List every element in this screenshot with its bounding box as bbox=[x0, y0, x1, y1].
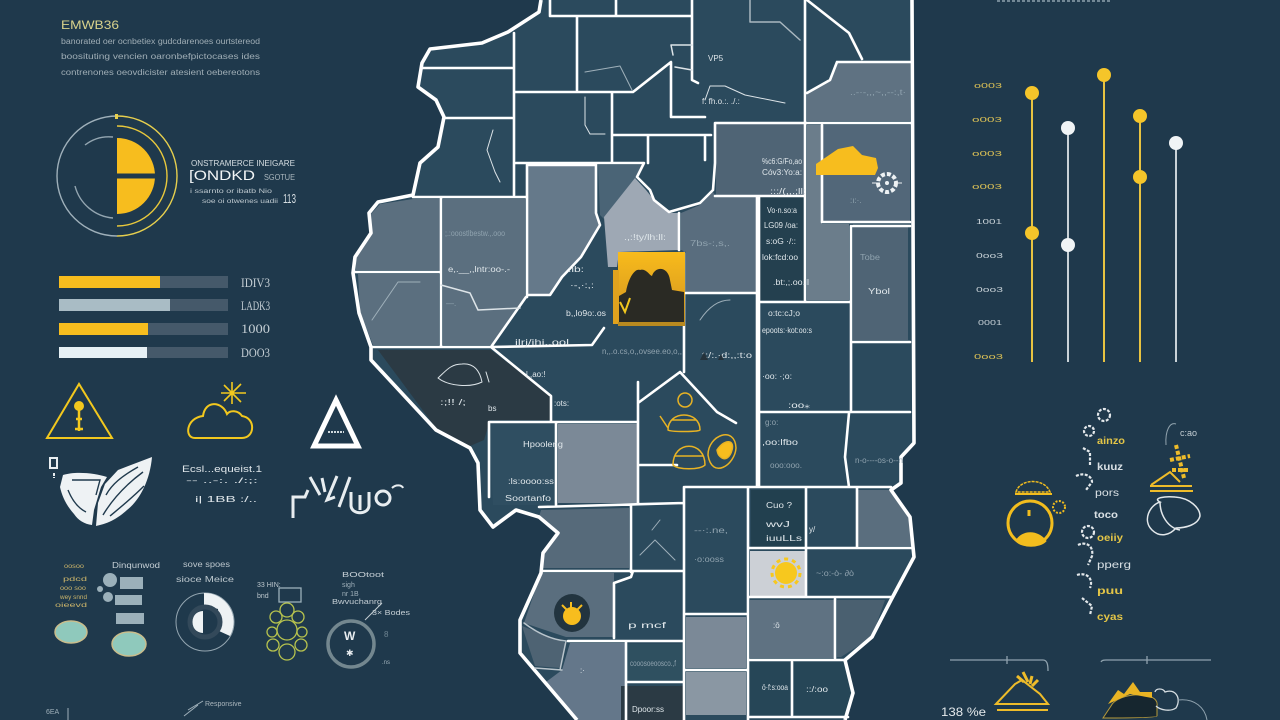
icon: yellow sun and cloud bbox=[188, 382, 252, 438]
map text labels: Tobe bbox=[860, 253, 881, 262]
chart: small clusters with text and clouds: ooo soo bbox=[60, 585, 86, 592]
chart: ring with labels: .ns bbox=[382, 660, 390, 666]
icon: yellow cloud on map bbox=[816, 146, 878, 175]
bar chart bbox=[59, 275, 270, 360]
map text labels: —. bbox=[446, 299, 456, 308]
bar chart: 1000 bbox=[241, 321, 270, 336]
lollipop axis labels: 0oo3 bbox=[976, 287, 1003, 294]
icon: scribbled white glyph cluster bbox=[293, 476, 403, 518]
chart: ring with labels: sigh bbox=[342, 582, 355, 589]
map text labels: n-o----os-o--n bbox=[855, 456, 903, 465]
map text labels: VP5 bbox=[708, 54, 724, 63]
map text labels: ·oo: ·;o: bbox=[762, 372, 792, 381]
map text labels bbox=[440, 54, 906, 714]
lollipop axis labels: 0001 bbox=[978, 320, 1002, 327]
map text labels: .,:!ty/lh:ll: bbox=[624, 233, 666, 242]
icon: yellow tree with mountain and white cloud: c:ao bbox=[1180, 428, 1197, 438]
chart: ring with labels: Bwvuchanrg bbox=[332, 597, 382, 606]
donut caption text bbox=[189, 159, 296, 206]
map text labels: iuuLLs bbox=[766, 534, 802, 543]
chart: small clusters with text and clouds: oosoo bbox=[64, 563, 84, 570]
map text labels: lok:fcd:oo bbox=[762, 253, 799, 262]
chart: small clusters with text and clouds: Dinqunwod bbox=[112, 561, 160, 570]
map text labels: cooosoeoosco.,f bbox=[630, 659, 677, 668]
map text labels: ;.:ooostlbestw.,.ooo bbox=[445, 229, 505, 238]
list: labels with flower icons: pperg bbox=[1097, 560, 1131, 571]
map text labels: p mcf bbox=[628, 621, 668, 630]
map text labels: Soortanfo bbox=[505, 494, 552, 503]
map text labels: :ots: bbox=[554, 399, 569, 408]
map text labels: --·:.ne, bbox=[694, 526, 728, 535]
lollipop axis labels: o003 bbox=[972, 184, 1002, 191]
map text labels: 7bs-:,s,. bbox=[690, 239, 730, 248]
icon: yellow-green lattice hexagon figure: 33 HIN: bbox=[257, 582, 281, 589]
map text labels: ·o:ooss bbox=[694, 555, 724, 564]
map text labels: n,,.o.cs,o,,ovsee.eo,o,, bbox=[602, 347, 682, 356]
lollipop axis labels: 0oo3 bbox=[974, 354, 1003, 361]
map text labels: :· bbox=[580, 666, 585, 675]
list: labels with flower icons: cyas bbox=[1097, 612, 1124, 623]
map text labels: f. fh.o.:. ./.: bbox=[702, 97, 740, 106]
chart: ring with labels: 3× Bodes bbox=[372, 608, 410, 617]
map text labels: :ō bbox=[773, 621, 780, 630]
map text labels: Cóv3:Yo:a: bbox=[762, 168, 802, 177]
map text labels: :ib: bbox=[568, 265, 584, 274]
bar chart: DOO3 bbox=[241, 345, 270, 360]
annotation text cluster: i| 1BB :/.. bbox=[195, 495, 257, 504]
map text labels: ooo:ooo. bbox=[770, 461, 802, 470]
title: heading and intro text bbox=[61, 18, 260, 77]
chart: lollipop columns bbox=[972, 68, 1183, 362]
icon: white wing bbox=[50, 457, 152, 526]
bottom-left partial labels bbox=[46, 701, 242, 720]
yellow photo tile with trees bbox=[613, 252, 685, 326]
map text labels: g:o: bbox=[765, 418, 778, 427]
annotation text cluster: -- ..-:. ./:;: bbox=[186, 478, 258, 485]
annotation text cluster: Ecsl...equeist.1 bbox=[182, 464, 262, 474]
map text labels: e,.__,,lntr:oo-.- bbox=[448, 265, 510, 274]
chart: small clusters with text and clouds: pdcd bbox=[63, 576, 88, 583]
map text labels: Cuo ? bbox=[766, 501, 793, 510]
bottom-left partial labels: 6EA bbox=[46, 709, 60, 716]
panel: county map bbox=[353, 0, 914, 720]
map text labels: %c6:G/Fo,ao bbox=[762, 157, 802, 166]
small dark ticks on map bbox=[700, 352, 724, 360]
icon: yellow tree with mountain and white cloud bbox=[1147, 424, 1200, 535]
map text labels: Ybol bbox=[868, 287, 890, 296]
label: bottom right number: 138 %e bbox=[941, 705, 986, 719]
title: heading and intro text: contrenones oeovdicister atesient oebereotons bbox=[61, 68, 260, 77]
list: labels with flower icons: oeiiy bbox=[1097, 533, 1123, 544]
donut caption text: 113 bbox=[283, 191, 296, 206]
map text labels: ·-,·:,: bbox=[570, 281, 594, 290]
map text labels: b,,lo9o:.os bbox=[566, 309, 606, 318]
map text labels: .bt:,;.oo.ll bbox=[773, 278, 809, 287]
chart: radial half donut bbox=[57, 114, 177, 236]
donut caption text: soe oi otwenes uadii bbox=[202, 198, 278, 205]
map text labels: :oo⁎ bbox=[788, 401, 810, 410]
donut caption text: [ONDKD bbox=[189, 167, 255, 183]
donut caption text: i ssarnto or ibatb Nio bbox=[190, 188, 273, 195]
bracket lines bottom right bbox=[950, 656, 1211, 671]
chart: ring with labels bbox=[328, 570, 410, 667]
icon: dark circle with yellow burst bbox=[554, 594, 590, 632]
title: heading and intro text: EMWB36 bbox=[61, 18, 119, 32]
map text labels: ilrj/ihi..ool bbox=[515, 338, 569, 347]
icon: white triangle bbox=[314, 400, 358, 446]
map text labels: l,,ao:! bbox=[526, 370, 546, 379]
list: labels with flower icons: pors bbox=[1095, 488, 1119, 499]
icon: yellow sun on light cell bbox=[772, 559, 800, 587]
lollipop axis labels: 1001 bbox=[976, 219, 1002, 226]
map text labels: wvJ bbox=[764, 520, 790, 529]
map text labels: bs bbox=[488, 404, 496, 413]
donut caption text: SGOTUE bbox=[264, 173, 295, 182]
chart: ring with labels: W bbox=[344, 629, 356, 643]
annotation text cluster bbox=[182, 464, 262, 504]
map text labels: ö·f:s:ooa bbox=[762, 683, 788, 692]
bar chart: LADK3 bbox=[241, 298, 270, 313]
chart: small clusters with text and clouds: wey snnd bbox=[59, 594, 87, 601]
map base outline fill bbox=[353, 0, 914, 720]
map text labels: :;!! /; bbox=[440, 398, 466, 407]
bottom-left partial labels: Responsive bbox=[205, 701, 242, 708]
map text labels: LG09 /oa: bbox=[764, 221, 798, 230]
map text labels: Dpoor:ss bbox=[632, 705, 664, 714]
chart: white donut with caption: sioce Meice bbox=[176, 575, 235, 584]
list: labels with flower icons: ainzo bbox=[1097, 436, 1125, 447]
chart: ring with labels: BOOtoot bbox=[342, 570, 385, 579]
top right partial text bbox=[997, 0, 1110, 2]
lollipop axis labels: o003 bbox=[972, 117, 1002, 124]
lollipop axis labels bbox=[972, 83, 1003, 361]
map text labels: Vo·n.so:a bbox=[767, 206, 797, 215]
chart: ring with labels: 8 bbox=[384, 630, 389, 639]
chart: ring with labels: ✱ bbox=[346, 648, 354, 658]
map text labels: epoots:·kot:oo:s bbox=[762, 326, 812, 335]
chart: ring with labels: nr 1B bbox=[342, 591, 359, 598]
title: heading and intro text: boosituting vencien oaronbefpictocases ides bbox=[61, 52, 260, 61]
chart: white donut with caption bbox=[176, 560, 235, 651]
lollipop axis labels: o003 bbox=[972, 151, 1002, 158]
map text labels: ,oo:lfbo bbox=[762, 438, 799, 447]
icon: yellow-green lattice hexagon figure bbox=[257, 582, 307, 660]
map text labels: :ls:oooo:ss bbox=[508, 477, 554, 486]
icon: white gear badge on map bbox=[872, 174, 902, 192]
title: heading and intro text: banorated oer ocnbetiex gudcdarenoes ourtstereod bbox=[61, 37, 260, 46]
map text labels: s:oG ·/:: bbox=[766, 237, 796, 246]
map text labels: t:/:.·d:,,:t:o bbox=[702, 351, 753, 360]
chart: small clusters with text and clouds: oieevd bbox=[55, 602, 88, 609]
donut caption text: ONSTRAMERCE INEIGARE bbox=[191, 159, 295, 168]
lollipop axis labels: o003 bbox=[974, 83, 1002, 90]
chart: white donut with caption: sove spoes bbox=[183, 560, 230, 569]
map text labels: :ı:·. bbox=[850, 196, 862, 205]
map text labels: Hpooleng bbox=[523, 440, 563, 449]
gray county cells bbox=[356, 62, 912, 720]
list: labels with flower icons bbox=[1076, 409, 1131, 623]
list: labels with flower icons: toco bbox=[1094, 510, 1118, 521]
bar chart: IDIV3 bbox=[241, 275, 270, 290]
map outer boundary bbox=[353, 0, 914, 720]
icon: yellow-green lattice hexagon figure: bnd bbox=[257, 593, 269, 600]
map text labels: o:tc:cJ;o bbox=[768, 309, 801, 318]
list: labels with flower icons: kuuz bbox=[1097, 462, 1123, 473]
icon: yellow warning triangle bbox=[47, 384, 112, 438]
list: labels with flower icons: puu bbox=[1097, 586, 1123, 597]
icon: yellow dome with rays bbox=[996, 672, 1048, 710]
icons: yellow outline domes bbox=[660, 393, 736, 469]
map text labels: :::/(,,.;ll: bbox=[770, 187, 806, 196]
icon: dark cloud with yellow crest and white outline cloud bbox=[1103, 682, 1207, 720]
map text labels: ..-·-,,,~,,--:,t· bbox=[850, 88, 906, 97]
lollipop axis labels: 0oo3 bbox=[976, 253, 1003, 260]
map text labels: ~:o:-ò- ∂ò bbox=[816, 569, 855, 578]
map terrain and river lines bbox=[372, 0, 800, 670]
county border lines bbox=[353, 0, 912, 720]
icon: yellow globe with dome bbox=[1008, 482, 1065, 546]
map text labels: ::/:oo bbox=[806, 685, 829, 694]
chart: small clusters with text and clouds bbox=[55, 561, 160, 656]
map text labels: y/ bbox=[809, 525, 816, 534]
